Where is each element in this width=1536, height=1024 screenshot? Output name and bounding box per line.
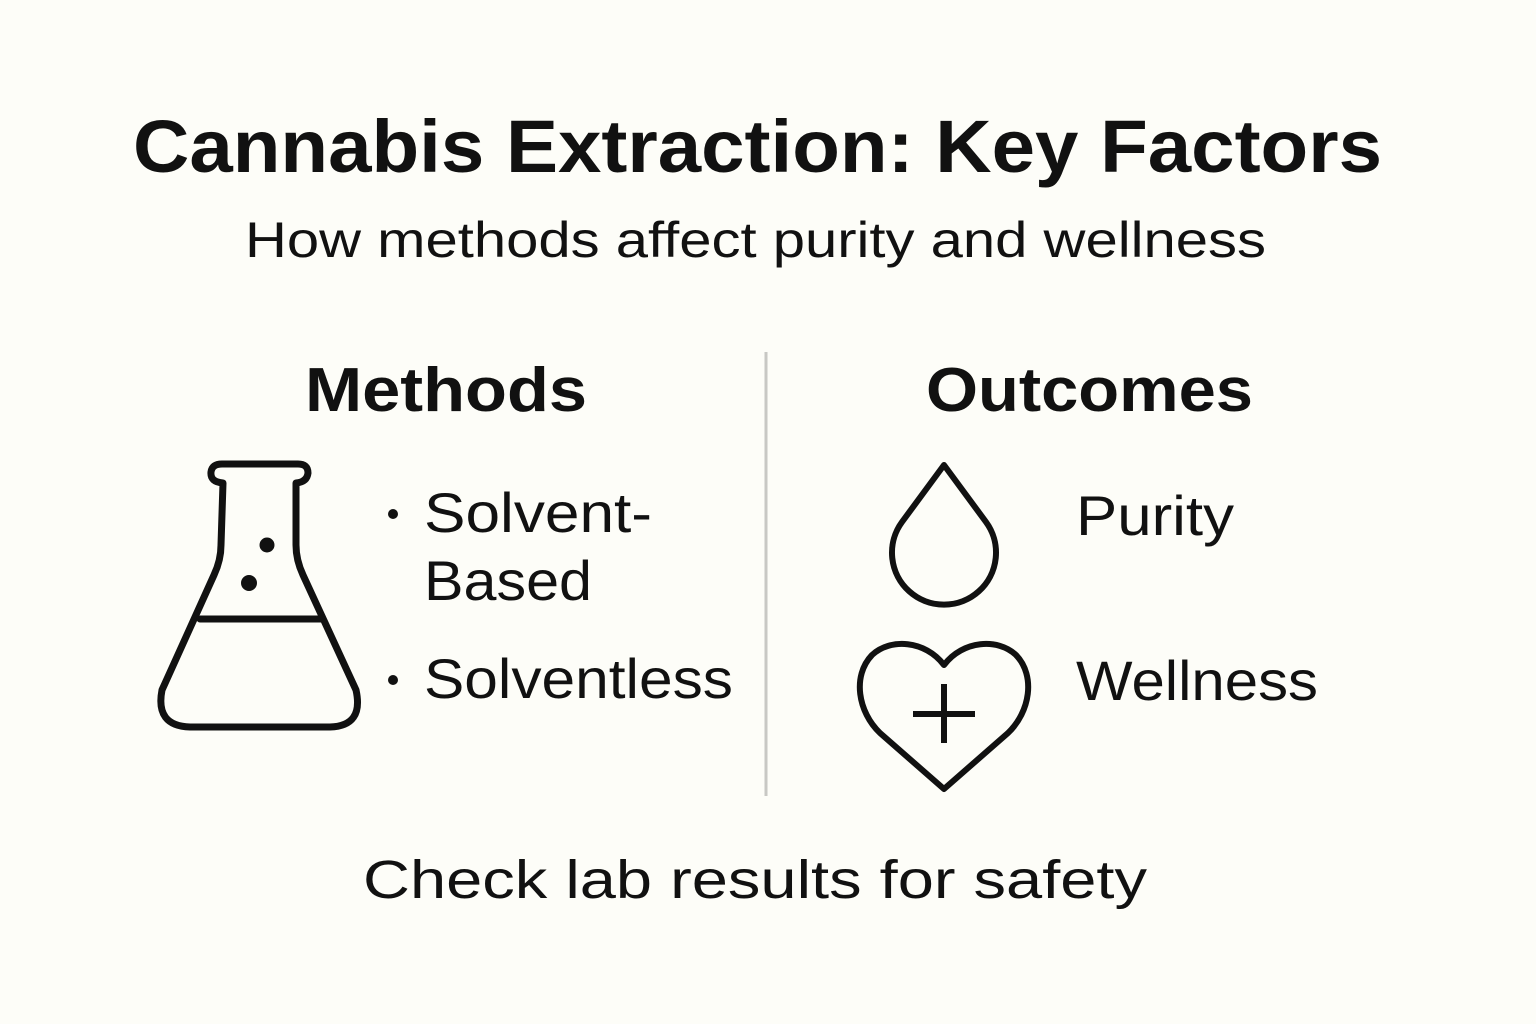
heading: Methods: Methods <box>305 356 587 425</box>
list: methods: Solventless <box>424 647 733 710</box>
list: methods: Based <box>424 549 592 612</box>
label: Purity: Purity <box>1076 484 1234 547</box>
title: Cannabis Extraction: Key Factors <box>133 105 1382 188</box>
icon: flask <box>161 464 358 727</box>
divider <box>764 352 768 796</box>
icon: heart with plus <box>860 644 1028 789</box>
icon: drop <box>892 465 996 605</box>
subtitle: How methods affect purity and wellness <box>245 212 1266 268</box>
list: methods <box>388 481 733 710</box>
list: methods: Solvent- <box>424 481 652 544</box>
label: Wellness: Wellness <box>1076 649 1318 712</box>
footer note: Check lab results for safety <box>363 850 1147 910</box>
heading: Outcomes: Outcomes <box>926 356 1253 425</box>
